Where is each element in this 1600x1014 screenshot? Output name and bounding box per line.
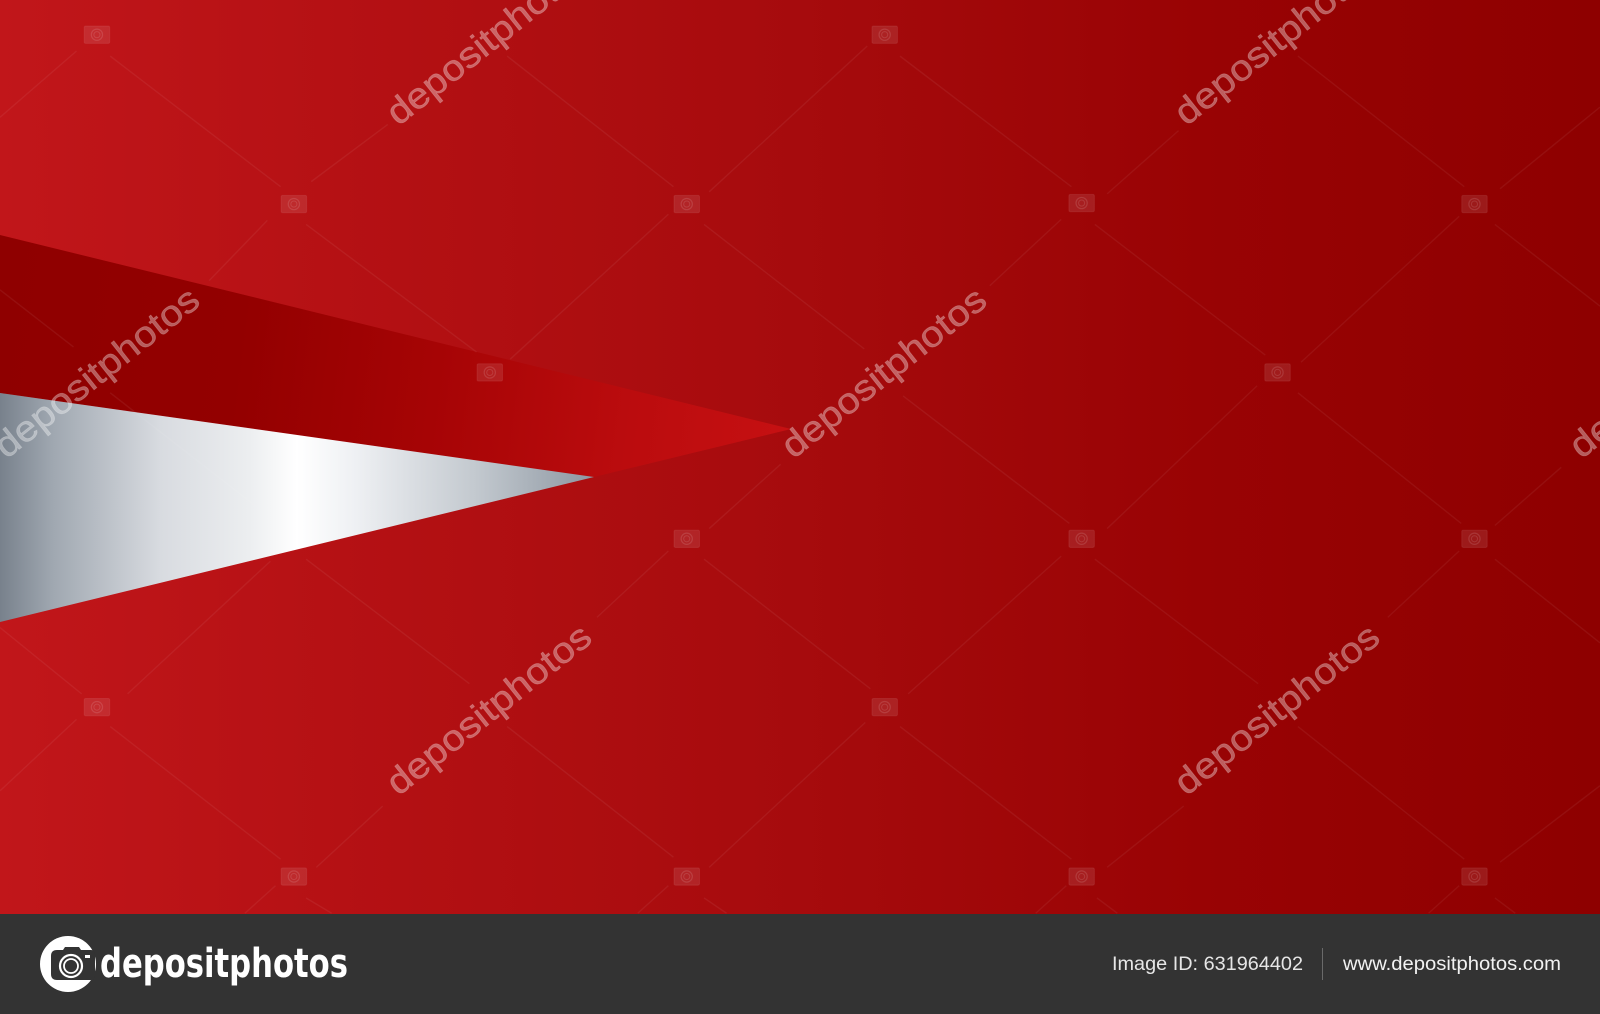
dark red angled band xyxy=(0,235,791,477)
image id text: Image ID: 631964402 xyxy=(1112,954,1303,975)
silver metallic triangle xyxy=(0,393,594,622)
footer bar xyxy=(0,914,1600,1014)
diagonal watermark wordmarks xyxy=(0,0,1600,803)
diagonal watermark wordmarks: depositphotos xyxy=(773,278,994,466)
footer divider xyxy=(1322,948,1323,980)
diagonal watermark wordmarks: depositphotos xyxy=(1166,615,1387,803)
icon: camera logo xyxy=(40,936,96,992)
watermark camera icons xyxy=(84,26,1487,885)
website url text: www.depositphotos.com xyxy=(1342,954,1561,975)
diagonal watermark wordmarks: depositphotos xyxy=(378,615,599,803)
logo wordmark: depositphotos xyxy=(100,941,348,987)
